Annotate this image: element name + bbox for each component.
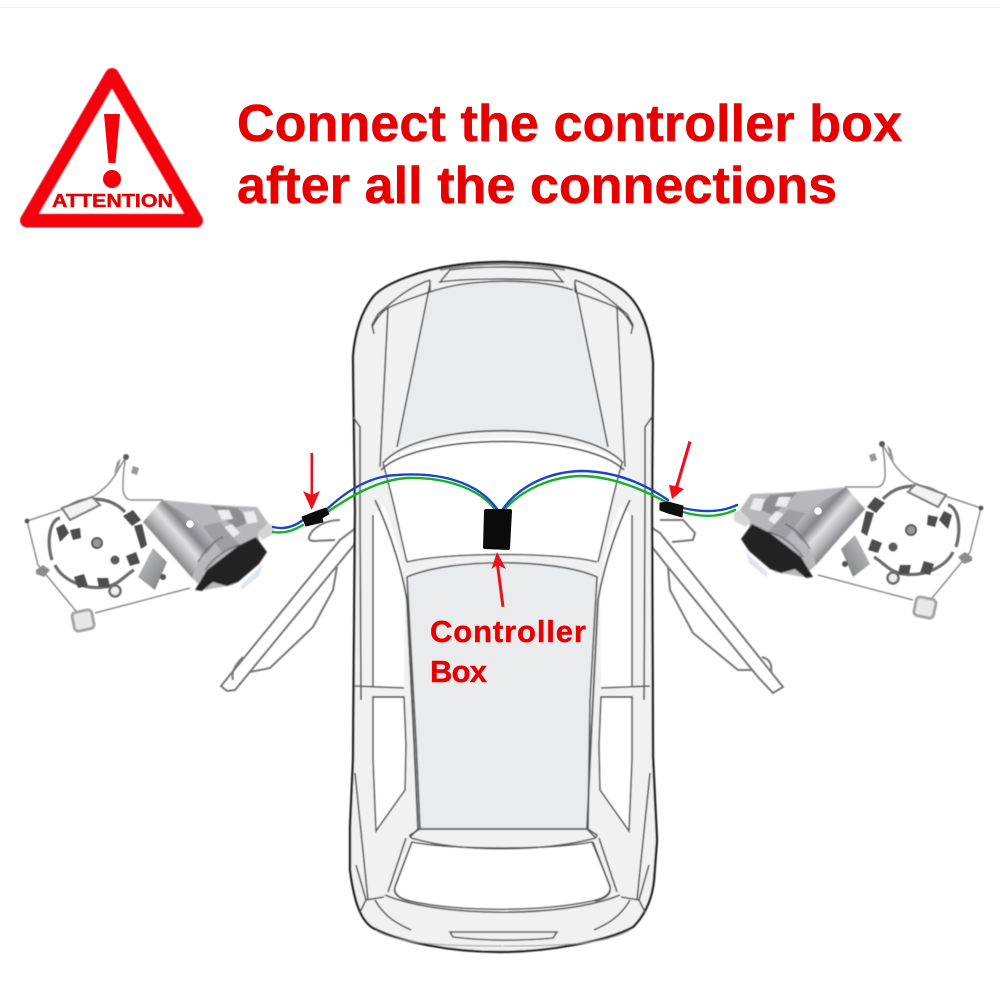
heading [237,95,902,215]
right side windows [599,505,632,831]
car top view [350,262,657,952]
icon: attention triangle [27,75,196,220]
wiring harness [273,471,737,533]
car body outline [350,262,657,952]
windshield [383,438,623,562]
blue wires [273,471,737,528]
left door [221,515,373,691]
heading: Connect the controller box [237,95,902,153]
left connector [302,508,329,526]
controller box [483,509,512,550]
arrow: controller box [492,552,506,607]
right half details [503,280,652,946]
arrow: left connector [303,453,320,510]
arrow: right connector [669,441,692,499]
label: controller box [430,614,586,689]
hood [397,281,608,448]
left half details [353,280,502,946]
rear window [395,842,610,909]
label: controller box: Box [430,654,488,689]
right window motor [734,441,983,619]
label: controller box: Controller [430,614,586,649]
heading: after all the connections [237,157,837,215]
green wires [273,476,735,533]
icon: attention triangle: ATTENTION [52,190,173,211]
roof [407,563,597,829]
centre body lines [381,264,624,940]
left side windows [373,505,406,831]
left window motor [25,454,274,632]
right connector [660,502,683,517]
right door [632,515,783,693]
